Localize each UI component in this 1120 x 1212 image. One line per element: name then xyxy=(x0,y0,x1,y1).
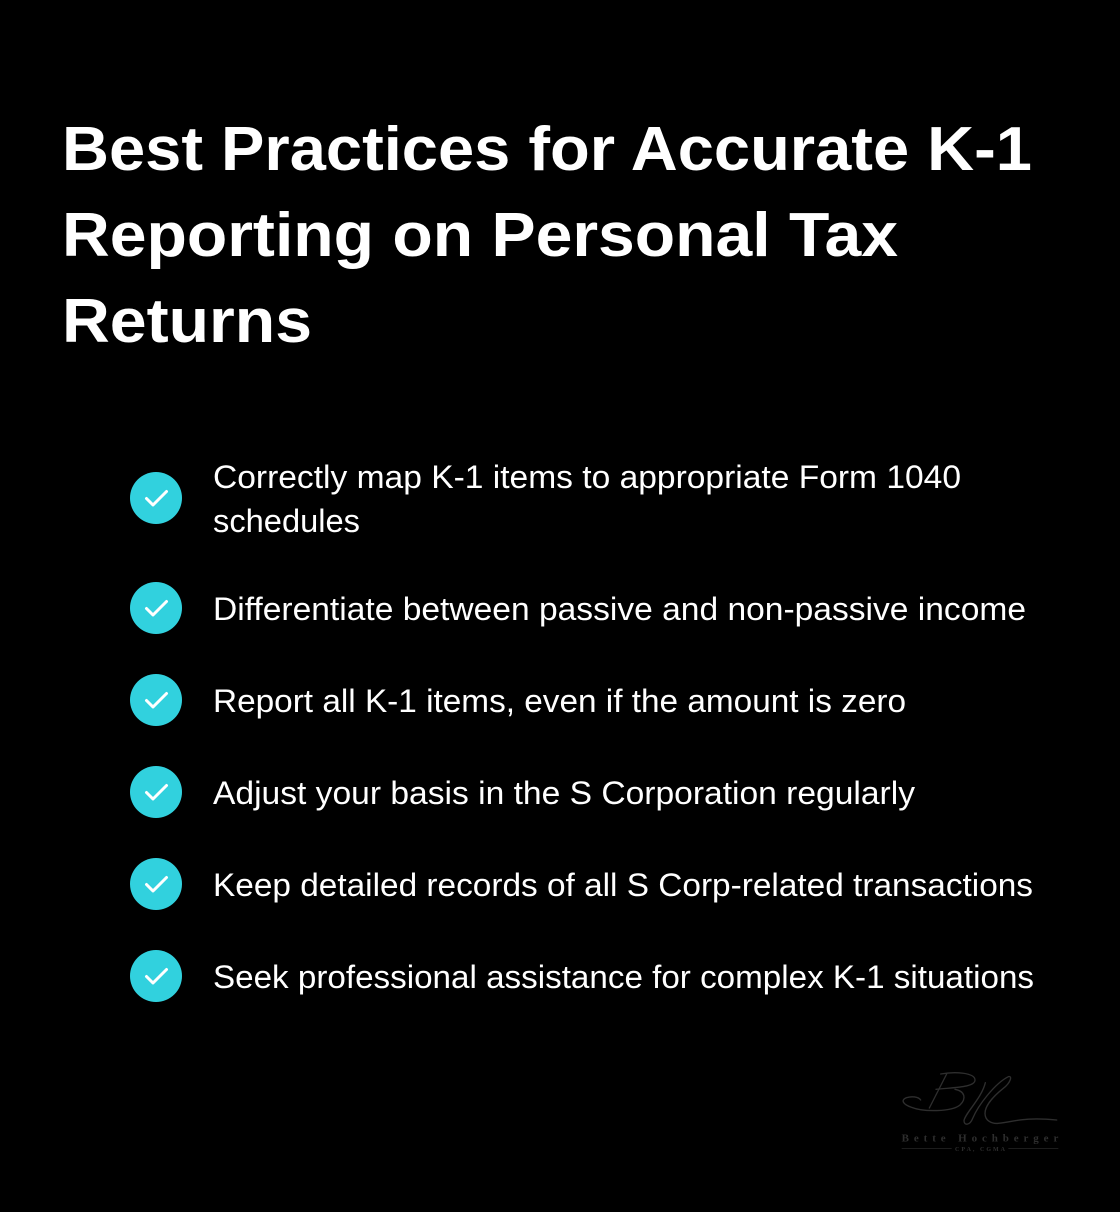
list item 3 xyxy=(130,674,906,726)
icon: check 5 xyxy=(130,858,182,910)
signature monogram xyxy=(903,1073,1057,1124)
icon: check 1 xyxy=(130,472,182,524)
title: Returns xyxy=(62,287,312,356)
list item 2 xyxy=(130,582,1026,634)
list item 4 xyxy=(130,766,915,818)
text: item 2: Differentiate between passive and non-passive income xyxy=(213,591,1026,627)
text: item 1: Correctly map K-1 items to appropriate Form 1040 xyxy=(213,459,961,495)
logo: Bette Hochberger signature xyxy=(902,1073,1058,1153)
checklist xyxy=(130,459,1034,1002)
list item 6 xyxy=(130,950,1034,1002)
title xyxy=(62,115,1032,356)
wordmark: Bette Hochberger xyxy=(902,1133,1058,1145)
icon: check 3 xyxy=(130,674,182,726)
icon: check 6 xyxy=(130,950,182,1002)
text: item 3: Report all K-1 items, even if the amount is zero xyxy=(213,683,906,719)
text: item 6: Seek professional assistance for complex K-1 situations xyxy=(213,959,1034,995)
list item 5 xyxy=(130,858,1033,910)
text: item 5: Keep detailed records of all S Corp-related transactions xyxy=(213,867,1033,903)
text: item 4: Adjust your basis in the S Corporation regularly xyxy=(213,775,915,811)
text: item 1 xyxy=(213,459,961,539)
icon: check 2 xyxy=(130,582,182,634)
text: item 1: schedules xyxy=(213,503,360,539)
list item 1 xyxy=(130,459,961,539)
credentials: CPA, CGMA xyxy=(955,1147,1006,1153)
title: Best Practices for Accurate K-1 xyxy=(62,115,1032,184)
title: Reporting on Personal Tax xyxy=(62,201,899,270)
icon: check 4 xyxy=(130,766,182,818)
